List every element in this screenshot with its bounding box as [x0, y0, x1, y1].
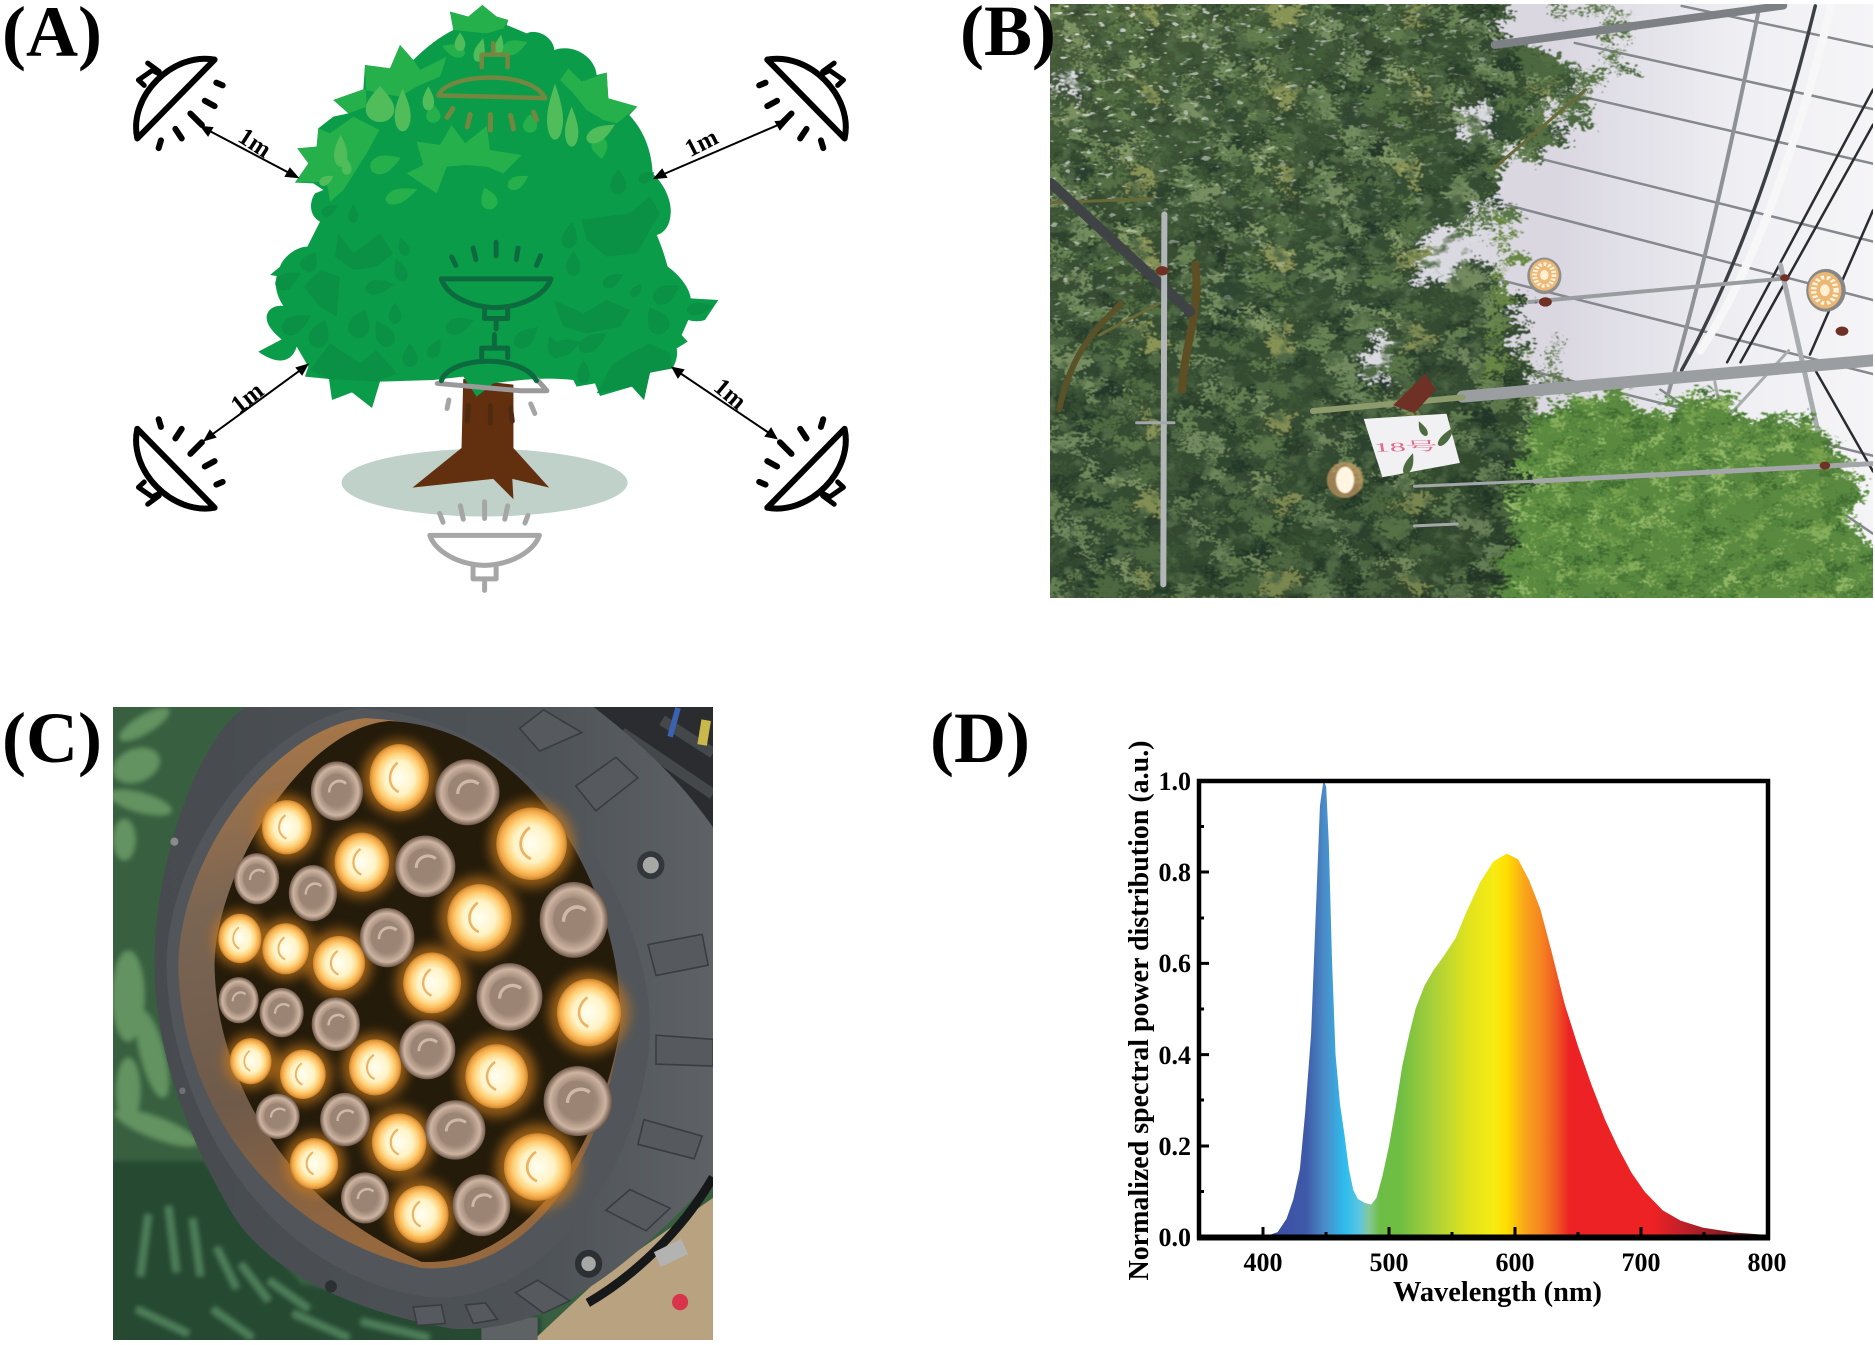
y axis tick labels: 0.6 — [1158, 949, 1191, 978]
sandy ground — [534, 1198, 713, 1340]
x axis tick labels: 800 — [1748, 1248, 1786, 1277]
ceiling lamps and side lamps — [136, 43, 846, 590]
axis ticks — [1199, 826, 1704, 1237]
lamp: below crown pointing down — [437, 335, 547, 423]
distance label upper right: 1m — [681, 124, 723, 163]
distance label lower right: 1m — [708, 373, 751, 415]
roof structure lines — [1481, 4, 1873, 535]
leaves over the sign — [1403, 421, 1454, 474]
crown silhouette — [258, 5, 718, 408]
y axis title: Normalized spectral power distribution (a.u.) — [1124, 740, 1155, 1280]
plant background — [100, 700, 726, 1345]
lamp: ground pointing up — [430, 502, 539, 590]
distance label lower left: 1m — [226, 377, 269, 419]
panel B: greenhouse photograph — [1050, 4, 1873, 598]
unlit LED lenses — [219, 759, 612, 1236]
sky specks through foliage — [1050, 4, 1504, 323]
tree crown — [258, 5, 718, 408]
pipe clamps — [1156, 266, 1848, 469]
lamp: lower right — [759, 419, 846, 509]
ground shadow ellipse — [342, 449, 628, 516]
outer leafy sprigs — [1457, 8, 1639, 390]
lit LED lenses — [218, 744, 621, 1243]
y axis tick labels: 0.2 — [1158, 1132, 1191, 1161]
red marker on ground — [672, 1294, 688, 1310]
lamp: upper right — [759, 59, 846, 148]
lamp: upper left — [136, 59, 223, 148]
spectrum area — [1269, 781, 1766, 1236]
distance arrow upper left — [202, 127, 297, 177]
background pipes — [1527, 262, 1822, 437]
tree branches — [1051, 90, 1585, 409]
side bracket — [588, 1177, 713, 1303]
distance arrow lower left — [205, 365, 307, 440]
y axis tick labels: 0.4 — [1158, 1041, 1191, 1070]
foreground pipes and posts — [1051, 6, 1873, 584]
paper sign — [1364, 414, 1460, 477]
warm glow around lit LEDs — [213, 740, 629, 1250]
highlight leaves — [318, 32, 618, 188]
foliage base — [1050, 4, 1588, 598]
plot frame — [1199, 781, 1768, 1238]
mid green leaf clusters — [295, 5, 637, 212]
panel D: spectral power distribution chart — [1124, 740, 1786, 1308]
distance arrow upper right — [655, 121, 787, 178]
distance arrow lower right — [673, 368, 776, 438]
sky gaps between leaves — [1051, 74, 1495, 390]
inner reflector rim — [178, 718, 620, 1268]
foliage tone overlay — [1050, 4, 1540, 598]
right bush — [1486, 384, 1873, 598]
handwritten sign text: 18号 — [1372, 439, 1439, 455]
LED lamp in photo, left — [1527, 258, 1561, 294]
x axis tick labels: 400 — [1244, 1248, 1282, 1277]
LED lamp in photo, right — [1806, 269, 1846, 312]
panel A: tree and lamp layout diagram — [136, 5, 846, 590]
lamp: inside crown pointing up — [441, 242, 551, 329]
main foliage mass — [1050, 4, 1645, 598]
mounting pole — [481, 1317, 538, 1340]
y axis tick labels: 0.8 — [1158, 858, 1191, 887]
ring inner shading — [166, 721, 320, 1254]
tread notches on ring — [413, 710, 713, 1326]
y axis tick labels: 0.0 — [1158, 1223, 1191, 1252]
lamp: hanging top of crown — [438, 43, 545, 130]
fern fronds — [136, 1206, 429, 1338]
lamp: lower left — [136, 419, 223, 509]
thick bottom axis — [1197, 1234, 1770, 1240]
y axis tick labels: 1.0 — [1158, 767, 1191, 796]
side bolt — [654, 1239, 688, 1267]
LED lamp glowing through foliage — [1327, 462, 1363, 498]
x axis tick labels: 500 — [1370, 1248, 1408, 1277]
greenhouse roof — [1404, 4, 1873, 547]
x axis tick labels — [1244, 1248, 1786, 1277]
fern area — [100, 1161, 542, 1345]
panel label C: (C) — [2, 698, 102, 778]
rear housing and cables — [594, 707, 713, 828]
screws on ring — [170, 838, 664, 1293]
lamp housing ring — [154, 707, 713, 1329]
base green — [100, 700, 726, 1345]
x axis tick labels: 700 — [1622, 1248, 1660, 1277]
foliage dark mottling — [1050, 4, 1511, 598]
y axis tick labels — [1158, 767, 1191, 1252]
x axis title: Wavelength (nm) — [1393, 1277, 1602, 1308]
panel label D: (D) — [930, 698, 1030, 778]
background leaves — [107, 702, 201, 1153]
distance label upper left: 1m — [233, 123, 276, 164]
darker lower leaves — [272, 168, 714, 400]
panel C: LED lamp close-up photograph — [100, 700, 726, 1345]
x axis tick labels: 600 — [1496, 1248, 1534, 1277]
tree trunk — [412, 379, 549, 499]
dark LED board — [215, 721, 620, 1262]
